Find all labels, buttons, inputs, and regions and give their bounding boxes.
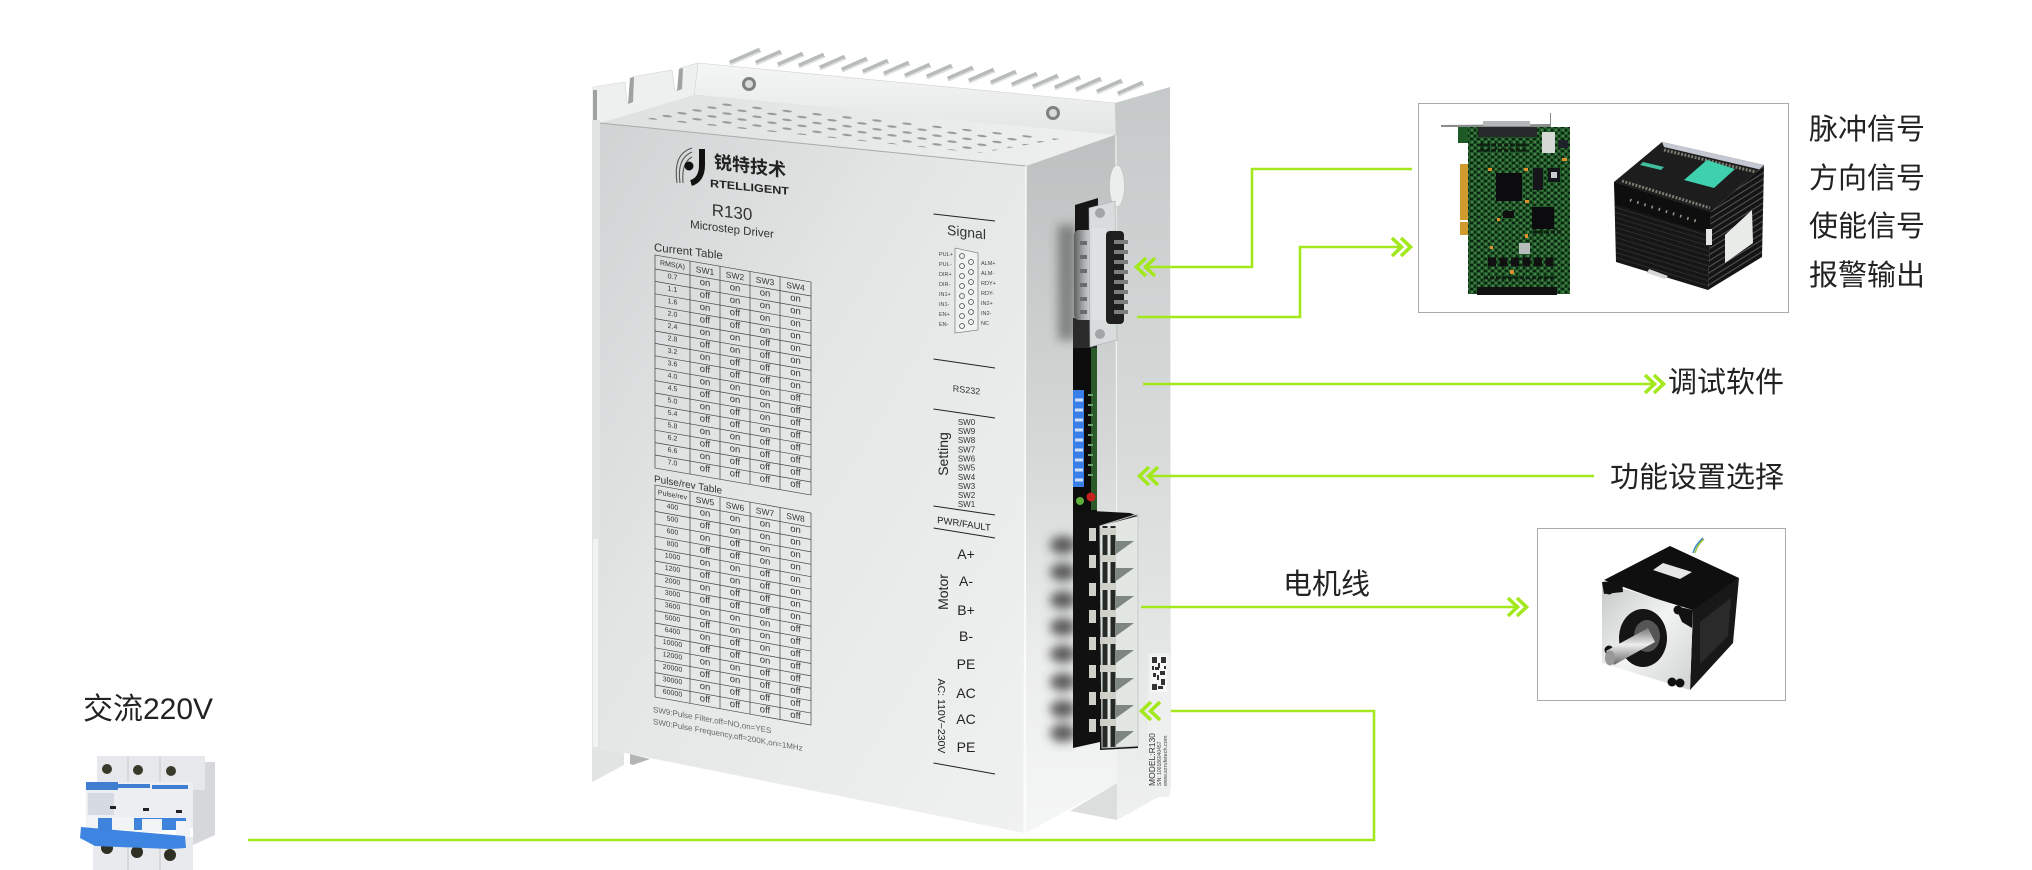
pulse per revolution table: 600 <box>667 528 678 537</box>
DIP switch labels: SW2 <box>958 491 976 500</box>
arrowhead into DIP switches <box>1140 467 1158 485</box>
connector line: alarm output to controller <box>1137 238 1410 317</box>
signal connector pinout: ALM+ <box>981 261 996 267</box>
pulse per revolution table: on <box>700 582 710 594</box>
current table: off <box>700 314 711 327</box>
current table: on <box>760 386 770 399</box>
motor terminal labels: AC <box>956 685 976 701</box>
current table: on <box>760 287 770 300</box>
pulse per revolution table: on <box>730 661 740 674</box>
icon: PLC controller <box>1614 142 1764 290</box>
current table: 6.6 <box>668 447 677 455</box>
pulse per revolution table: on <box>730 525 740 538</box>
pulse per revolution table: 3000 <box>665 590 680 599</box>
pulse per revolution table: SW7 <box>756 505 774 518</box>
AC voltage label: AC: 110V~230V <box>935 679 947 753</box>
pulse per revolution table: on <box>790 536 801 549</box>
pulse per revolution table: off <box>700 520 711 532</box>
current table: 5.0 <box>668 397 677 406</box>
pulse per revolution table: 10000 <box>663 639 682 649</box>
pulse per revolution table: on <box>760 518 770 531</box>
pulse per revolution table: off <box>760 692 771 704</box>
current table: on <box>700 401 710 414</box>
pulse per revolution table: SW6 <box>726 500 744 513</box>
signal connector pinout: PUL- <box>939 262 952 268</box>
motor terminal labels: PE <box>957 656 975 672</box>
current table: on <box>700 351 710 364</box>
pulse per revolution table: 6400 <box>665 627 680 637</box>
driver unit <box>592 50 1171 833</box>
panel: stepper motor <box>1538 528 1786 700</box>
current table: off <box>700 289 711 302</box>
current table: off <box>760 436 771 449</box>
signal connector pinout: EN- <box>939 322 949 328</box>
current table: off <box>730 356 741 369</box>
current table: 1.1 <box>668 286 677 294</box>
current table: off <box>790 441 801 454</box>
pulse per revolution table: on <box>760 642 770 655</box>
pulse per revolution table: off <box>790 635 801 648</box>
current table: 4.5 <box>668 385 677 393</box>
signal connector pinout: DIR- <box>939 282 950 288</box>
pulse per revolution table: on <box>790 548 801 561</box>
DIP switch labels: SW6 <box>958 454 976 464</box>
pulse per revolution table: on <box>760 555 770 568</box>
left edge strip <box>592 120 624 782</box>
pulse per revolution table: off <box>790 647 801 660</box>
current table: 1.6 <box>668 298 677 307</box>
current table <box>655 255 811 495</box>
current table: off <box>700 388 711 401</box>
signal connector pinout: IN1- <box>939 302 950 308</box>
pulse per revolution table: 1200 <box>665 565 680 575</box>
pulse per revolution table: on <box>790 523 801 536</box>
current table: on <box>700 277 710 290</box>
pulse per revolution table: Pulse/rev <box>658 490 688 502</box>
signal connector pinout: IN2+ <box>981 301 993 307</box>
current table: on <box>760 399 770 412</box>
current table: off <box>790 478 801 491</box>
pulse per revolution table: off <box>790 660 801 673</box>
model and serial text: S/N: 100186040457 <box>1157 741 1163 786</box>
model name: R130 <box>712 201 752 224</box>
pulse per revolution table: 400 <box>667 503 678 512</box>
current table: 4.0 <box>668 372 677 381</box>
current table: off <box>730 456 741 468</box>
current table: SW4 <box>786 280 805 293</box>
pulse per revolution table: on <box>790 610 801 623</box>
current table: off <box>730 468 741 481</box>
signal connector pinout: DIR+ <box>939 272 952 278</box>
signal connector pinout: PUL+ <box>939 252 953 258</box>
current table: on <box>790 367 801 380</box>
signal connector pinout: RDY- <box>981 291 994 297</box>
current table: off <box>790 392 801 404</box>
control signal labels: 使能信号 <box>1809 210 1925 243</box>
current table: RMS(A) <box>660 260 685 271</box>
current table: on <box>730 282 740 295</box>
pulse per revolution table: off <box>760 568 771 580</box>
motor terminal labels: AC <box>956 711 976 727</box>
QR code <box>1151 656 1167 692</box>
current table: off <box>760 374 771 387</box>
motor terminal labels: A- <box>959 573 973 589</box>
current table: off <box>790 429 801 442</box>
setting label: Setting <box>935 432 951 476</box>
pulse per revolution table: off <box>760 580 771 593</box>
current table: off <box>790 404 801 417</box>
pulse per revolution table: SW8 <box>786 511 805 524</box>
current table: on <box>700 326 710 339</box>
current table: SW3 <box>756 274 774 288</box>
pulse per revolution table: 3600 <box>665 602 680 612</box>
current table: on <box>790 354 801 367</box>
power line from breaker to driver <box>248 711 1374 840</box>
current table: on <box>790 292 801 305</box>
current table: off <box>790 454 801 466</box>
arrowhead toward motor <box>1508 598 1526 616</box>
motor and power terminal block <box>1073 510 1138 750</box>
DIP switch labels: SW5 <box>958 464 976 472</box>
side face <box>1026 135 1117 833</box>
motor terminal labels: PE <box>957 739 975 755</box>
current table: on <box>730 394 740 406</box>
pulse per revolution table: 60000 <box>663 688 682 699</box>
current table: on <box>730 431 740 444</box>
current table: 2.4 <box>668 323 677 331</box>
RS232 label: RS232 <box>953 383 980 397</box>
pulse per revolution table: off <box>760 592 771 605</box>
pulse per revolution table: off <box>730 550 741 563</box>
current table: on <box>760 424 770 436</box>
current table: off <box>760 349 771 362</box>
current table: on <box>790 330 801 342</box>
current table: on <box>730 344 740 357</box>
current table: off <box>760 362 771 374</box>
pulse per revolution table: on <box>730 612 740 625</box>
signal connector pinout: ALM- <box>981 271 994 277</box>
current table: off <box>700 438 711 451</box>
pulse per revolution table: on <box>700 532 710 545</box>
connector line: function setting to DIP switches <box>1140 467 1594 485</box>
control signal labels <box>1809 113 1925 292</box>
pulse per revolution table: off <box>730 599 741 612</box>
pulse per revolution table: on <box>760 654 770 667</box>
rear product label <box>1147 653 1170 797</box>
pulse per revolution table: off <box>790 709 801 722</box>
pulse per revolution table: off <box>760 679 771 692</box>
current table: SW2 <box>726 269 744 282</box>
pulse per revolution table: 2000 <box>665 577 680 587</box>
DIP switch labels: SW1 <box>958 500 976 509</box>
pulse per revolution table: on <box>790 561 801 573</box>
model and serial text <box>1147 733 1169 787</box>
current table heading: Current Table <box>654 242 723 262</box>
current table: off <box>700 463 711 476</box>
left mounting flange <box>593 63 698 332</box>
signal label: Signal <box>947 222 986 242</box>
current table: on <box>760 324 770 337</box>
pulse table heading: Pulse/rev Table <box>654 474 723 497</box>
current table: off <box>790 416 801 429</box>
pulse per revolution table: off <box>700 569 711 582</box>
pulse per revolution table: 500 <box>667 516 678 525</box>
pulse per revolution table: off <box>700 594 711 607</box>
motor terminal labels <box>956 546 976 755</box>
pulse per revolution table: off <box>790 672 801 685</box>
current table: off <box>730 369 741 382</box>
pulse per revolution table: off <box>730 649 741 662</box>
pulse per revolution table: on <box>700 557 710 570</box>
current table: on <box>790 317 801 330</box>
pulse filter and frequency notes: SW9:Pulse Filter,off=NO,on=YES <box>653 705 771 735</box>
current table: on <box>790 342 801 355</box>
current table: on <box>700 302 710 314</box>
pulse per revolution table: off <box>730 686 741 699</box>
current table: off <box>760 461 771 474</box>
control signal labels: 脉冲信号 <box>1809 113 1925 146</box>
power and fault label: PWR/FAULT <box>937 515 991 534</box>
pulse per revolution table: off <box>700 644 711 656</box>
product subtitle: Microstep Driver <box>690 219 774 241</box>
current table: 3.6 <box>668 360 677 369</box>
pulse filter and frequency notes: SW0:Pulse Frequency,off=200K,on=1MHz <box>653 717 803 753</box>
current table: 6.2 <box>668 434 677 443</box>
current table: off <box>760 473 771 486</box>
connector line: controller to signal port <box>1136 169 1412 276</box>
panel: controllers <box>1418 104 1788 312</box>
current table: off <box>760 337 771 350</box>
current table: on <box>700 450 710 463</box>
top perforated face <box>600 95 1115 166</box>
connector line: RS232 to debug software <box>1143 375 1664 393</box>
current table: off <box>730 406 741 419</box>
pulse per revolution table: on <box>760 617 770 630</box>
current table: on <box>790 305 801 318</box>
signal connector pinout: IN1+ <box>939 292 951 298</box>
connector line: driver to motor <box>1141 598 1526 616</box>
pulse per revolution table: on <box>700 631 710 644</box>
pulse per revolution table: on <box>730 624 740 637</box>
signal connector pinout: NC <box>981 321 989 327</box>
terminal panel divider lines <box>934 214 995 774</box>
brand logo <box>676 148 789 198</box>
model and serial text: www.szrufetech.com <box>1163 735 1169 787</box>
DIP switch labels: SW9 <box>958 427 976 436</box>
DIP switch labels: SW4 <box>958 473 976 482</box>
motor terminal labels: A+ <box>957 546 975 562</box>
pulse per revolution table: off <box>760 704 771 717</box>
pulse per revolution table: 12000 <box>663 651 682 662</box>
current table: 5.4 <box>668 410 677 418</box>
pulse per revolution table: off <box>730 587 741 600</box>
DIP switch labels <box>958 418 976 509</box>
pulse per revolution table: on <box>730 513 740 525</box>
flange tabs <box>593 68 683 332</box>
pulse per revolution table: on <box>790 598 801 611</box>
control signal labels: 方向信号 <box>1809 162 1925 195</box>
motor terminal labels: B+ <box>957 602 975 618</box>
current table: on <box>760 411 770 424</box>
current table: on <box>730 332 740 344</box>
current table: on <box>700 376 710 389</box>
current table: on <box>730 443 740 456</box>
current table: on <box>700 426 710 438</box>
current table: 0.7 <box>668 273 677 282</box>
motor cable label: 电机线 <box>1283 568 1370 601</box>
notch under side <box>1070 783 1117 820</box>
current table: SW1 <box>696 264 714 277</box>
pulse per revolution table: 1000 <box>665 552 680 562</box>
pulse per revolution table: on <box>700 606 710 619</box>
motor terminal labels: B- <box>959 628 973 644</box>
control signal labels: 报警输出 <box>1809 259 1925 292</box>
DIP switch labels: SW8 <box>958 436 976 445</box>
icon: stepper motor <box>1602 538 1739 690</box>
DIP switch labels: SW0 <box>958 418 976 427</box>
pulse per revolution table: on <box>760 630 770 642</box>
heat sink fins <box>730 50 1143 96</box>
pulse per revolution table: off <box>730 637 741 649</box>
current table: off <box>700 339 711 352</box>
current table: off <box>700 413 711 426</box>
current table: on <box>790 379 801 392</box>
pulse per revolution table: 30000 <box>663 676 682 686</box>
pulse per revolution table <box>655 485 811 725</box>
pulse per revolution table: on <box>790 573 801 586</box>
pulse per revolution table: on <box>730 674 740 687</box>
current table: off <box>730 307 741 320</box>
pulse per revolution table: on <box>730 575 740 587</box>
pulse per revolution table: 20000 <box>663 664 682 674</box>
DIP switch labels: SW3 <box>958 482 976 491</box>
pulse per revolution table: off <box>790 685 801 697</box>
signal connector pinout <box>939 248 996 333</box>
pulse per revolution table: off <box>790 697 801 710</box>
current table: off <box>730 418 741 431</box>
pulse per revolution table: on <box>700 656 710 669</box>
arrowhead toward debug software <box>1645 375 1664 393</box>
signal connector pinout: RDY+ <box>981 281 996 287</box>
debug software label: 调试软件 <box>1668 366 1784 399</box>
connector shadows <box>1050 225 1076 742</box>
current table: 5.8 <box>668 422 677 431</box>
bottom foot <box>630 754 650 765</box>
DIP switch labels: SW7 <box>958 446 976 454</box>
current table: 7.0 <box>668 459 677 468</box>
brand logo: RTELLIGENT <box>710 178 789 198</box>
control board slot, DIP switches and LEDs <box>1073 340 1097 512</box>
brand logo: 锐特技术 <box>714 152 786 181</box>
pulse per revolution table: off <box>700 619 711 632</box>
front face <box>600 123 1026 833</box>
DB15 signal connector <box>1073 198 1128 348</box>
input label: AC 220V: 交流220V <box>83 693 213 726</box>
pulse per revolution table: off <box>700 693 711 706</box>
rear plate with screws <box>694 63 1116 136</box>
pulse per revolution table: on <box>700 681 710 694</box>
current table: on <box>730 294 740 307</box>
pulse per revolution table: on <box>790 585 801 598</box>
current table: off <box>790 466 801 479</box>
current table: off <box>760 448 771 461</box>
pulse per revolution table: 800 <box>667 540 678 549</box>
current table: 2.0 <box>668 310 677 319</box>
current table: on <box>760 300 770 312</box>
signal connector pinout: EN+ <box>939 312 950 318</box>
function setting label: 功能设置选择 <box>1610 461 1784 494</box>
motor label: Motor <box>935 574 951 610</box>
pulse per revolution table: on <box>760 530 770 543</box>
model and serial text: MODEL:R130 <box>1147 733 1157 786</box>
pulse per revolution table: off <box>760 667 771 680</box>
current table: off <box>700 364 711 376</box>
pulse per revolution table: off <box>700 544 711 557</box>
pulse per revolution table: off <box>760 605 771 618</box>
pulse per revolution table: off <box>730 699 741 711</box>
current table: 3.2 <box>668 348 677 356</box>
arrowhead into AC terminals <box>1142 702 1160 720</box>
pulse per revolution table: 5000 <box>665 614 680 624</box>
pulse per revolution table: on <box>730 562 740 575</box>
pulse per revolution table: off <box>730 537 741 550</box>
pulse per revolution table: on <box>760 543 770 556</box>
rating sticker <box>1110 165 1124 207</box>
pulse per revolution table: on <box>700 507 710 520</box>
current table: on <box>760 312 770 325</box>
far side panel <box>1115 87 1171 820</box>
icon: circuit breaker <box>80 756 215 870</box>
current table: off <box>730 319 741 332</box>
pulse per revolution table: SW5 <box>696 494 714 508</box>
current table: 2.8 <box>668 335 677 344</box>
arrowhead toward controller <box>1392 238 1410 256</box>
signal connector pinout: IN2- <box>981 311 992 317</box>
pulse per revolution table: off <box>790 623 801 635</box>
icon: motion control card <box>1441 113 1570 295</box>
current table: on <box>730 381 740 394</box>
arrowhead into signal port <box>1136 258 1155 276</box>
pulse per revolution table: off <box>700 668 711 681</box>
